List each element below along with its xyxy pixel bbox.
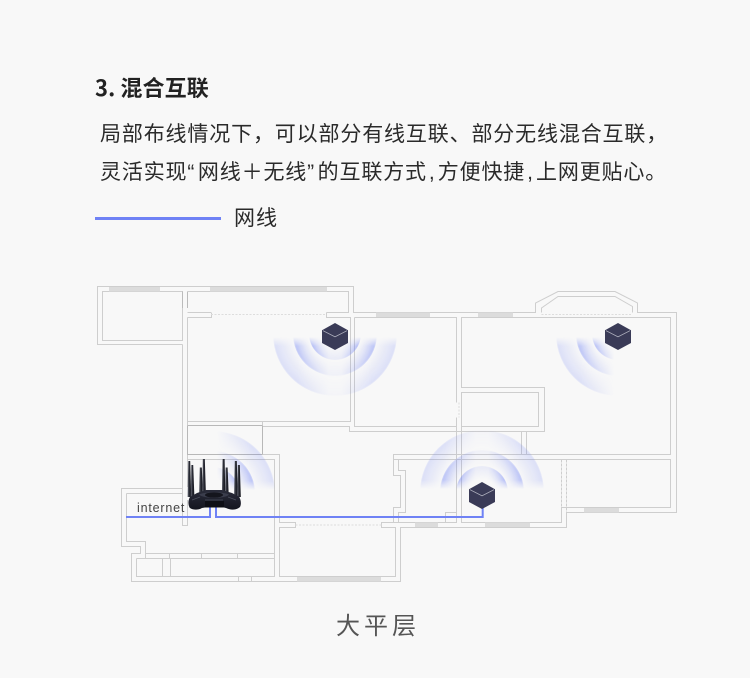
windows: [109, 287, 619, 582]
legend: wired line: [95, 202, 278, 232]
wifi waves: router: [220, 434, 274, 489]
legend: wired line: 网线: [234, 202, 278, 232]
description text: [100, 118, 668, 186]
icon: router: [188, 459, 241, 510]
internet label: internet: [137, 501, 185, 515]
description text: 局部布线情况下，可以部分有线互联、部分无线混合互联，: [100, 118, 668, 148]
wifi waves: bedroom: [556, 338, 612, 394]
title: 3. 混合互联: [95, 71, 209, 103]
icon: node cube bedroom: [605, 323, 631, 350]
caption: 大平层: [336, 606, 420, 641]
wired connection lines: [126, 506, 483, 517]
floor plan walls: [98, 286, 676, 582]
wifi waves: centre room: [421, 432, 544, 488]
description text: 灵活实现“网线＋无线”的互联方式,方便快捷,上网更贴心。: [100, 156, 667, 186]
wifi waves: living room: [274, 338, 396, 394]
floor plan diagram: [97, 286, 677, 582]
icon: node cube centre room: [469, 482, 495, 509]
icon: node cube living room: [322, 323, 348, 350]
